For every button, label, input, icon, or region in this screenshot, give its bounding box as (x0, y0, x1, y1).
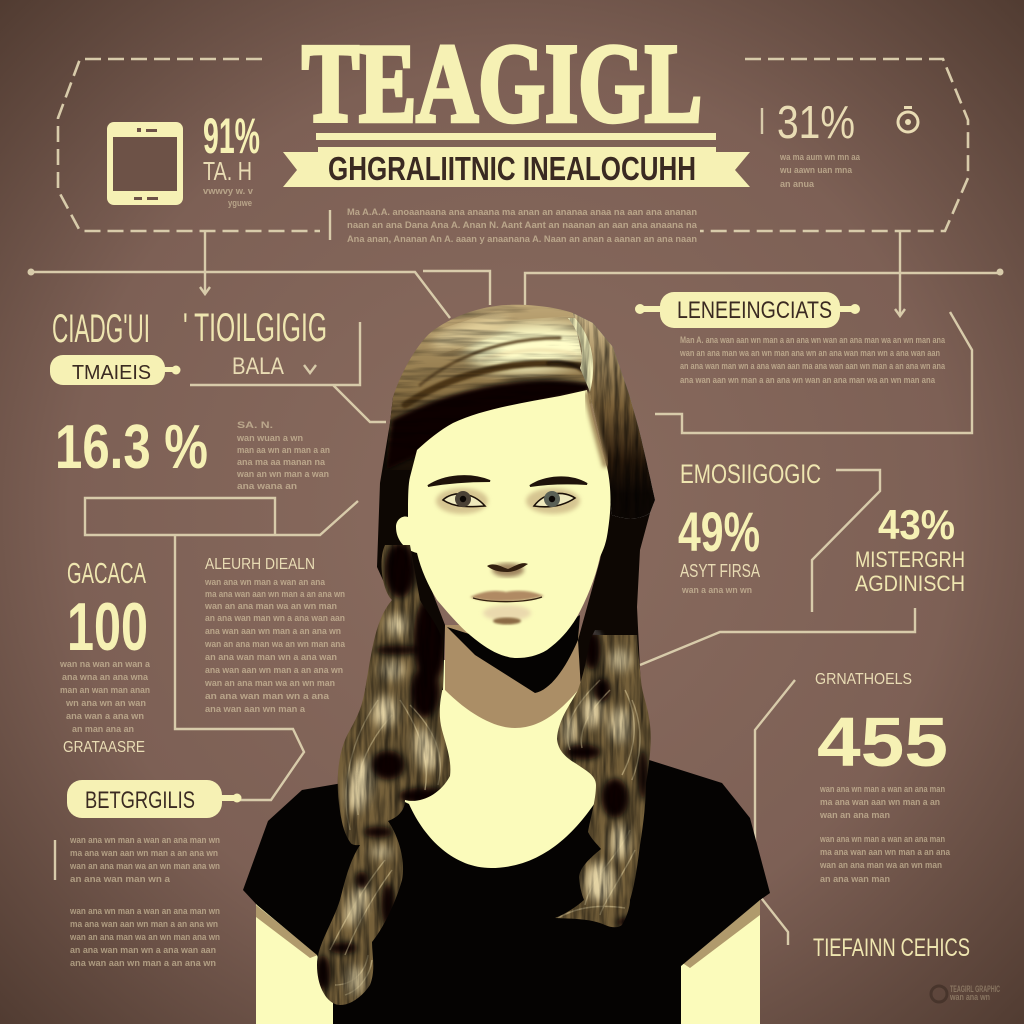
stat: 43%: AGDINISCH (855, 571, 965, 596)
portrait (243, 300, 770, 1024)
text block: beside 16.3% (236, 420, 330, 491)
pill: BETGRGILIS: BETGRGILIS (85, 787, 195, 814)
subtitle ribbon: GHGRALIITNIC INEALOCUHH (328, 150, 696, 187)
text block: beside 16.3%: ana ma aa manan na (237, 457, 326, 467)
stat: 100: wan na wan an wan a (59, 659, 151, 669)
stat: 49%: ASYT FIRSA (680, 561, 760, 581)
text block: beside 16.3%: ana wana an (237, 481, 297, 491)
stat: 91%: vwwvy w. v (203, 186, 253, 196)
text block: middle left: an ana wan man wn a ana wan (205, 652, 337, 662)
text block: beside 16.3%: SA. N. (237, 420, 273, 430)
stat: 49%: 49% (678, 500, 760, 563)
stat: 100: GRATAASRE (63, 739, 145, 756)
intro text block: naan an ana Dana Ana A. Anan N. Aant Aant an naanan an aan ana anaana na (347, 220, 698, 230)
text block: beside 16.3%: wan wuan a wn (236, 433, 303, 443)
logo mark (931, 984, 1000, 1002)
stat: 100: an man ana an (72, 724, 134, 734)
sleeve edges (256, 900, 760, 968)
text block: middle left: wan ana wn man a wan an ana (204, 577, 326, 587)
text block: middle left: wan an ana man wa an wn man ana (204, 639, 346, 649)
text block: lower left: ma ana wan aan wn man a an ana wn (70, 919, 218, 929)
pill: LENEEINGCIATS: LENEEINGCIATS (677, 297, 832, 324)
pill: BETGRGILIS (67, 780, 242, 818)
text block: upper right: Man A. ana wan aan wn man a an ana wn wan an ana man wa an wn man ana (680, 335, 946, 345)
stat: 49%: wan a ana wn wn (681, 585, 752, 595)
stat: 91%: yguwe (228, 198, 252, 208)
text block: middle left: ana wan aan wn man a an ana wn (205, 665, 343, 675)
text block: lower right: ma ana wan aan wn man a an (820, 797, 940, 807)
text block: middle left: ma ana wan aan wn man a an ana wn (205, 589, 345, 599)
label: BALA: BALA (232, 353, 284, 380)
face (396, 390, 610, 658)
stat: 100: man an wan man anan (60, 685, 150, 695)
eyes (436, 488, 580, 514)
stat: 91%: 91% (203, 108, 260, 164)
text block: lower left: an ana wan man wn a (70, 874, 171, 884)
text block: upper right: wan an ana man wa an wn man ana wn an ana wan man wn a ana wan aan (679, 348, 940, 358)
stat: 49% (678, 500, 760, 595)
text block: middle left: ana wan aan wn man a an ana wn (205, 626, 341, 636)
heading: left: ' TIOILGIGIG (183, 306, 327, 350)
text block: middle left: ana wan aan wn man a (205, 704, 306, 714)
text block: lower right: wan an ana man wa an wn man (819, 860, 942, 870)
text block: lower left: wan ana wn man a wan an ana man wn (69, 906, 220, 916)
pill: LENEEINGCIATS (635, 292, 860, 328)
nose (487, 563, 528, 577)
hair back (365, 305, 655, 690)
intro text block: Ma A.A.A. anoaanaana ana anaana ma anan an ananaa anaa na aan ana ananan (347, 207, 697, 217)
pill: TMAIEIS (50, 355, 180, 385)
right braid (555, 630, 651, 928)
heading: EMOSIIGOGIC: EMOSIIGOGIC (680, 459, 821, 489)
stat: 91% (203, 108, 260, 208)
stat: 31%: an anua (780, 179, 815, 189)
text block: middle left: wan an ana man wa an wn man (204, 601, 337, 611)
text block: lower left: wan an ana man wa an wn man ana wn (69, 932, 220, 942)
text block: lower left: ana wan aan wn man a an ana wn (70, 958, 216, 968)
stat: 31%: wu aawn uan mna (779, 165, 853, 175)
text block: lower left: wan ana wn man a wan an ana man wn (69, 835, 220, 845)
forehead hair shadow (587, 392, 606, 467)
stat: 16.3%: 16.3 % (55, 413, 208, 482)
icon: clock (898, 106, 918, 132)
heading: left: CIADG'UI (52, 307, 150, 351)
text block: beside 16.3%: wan an wn man a wan (236, 469, 329, 479)
text block: middle left (204, 556, 346, 714)
text block: lower left: an ana wan man wn a ana wan aan (70, 945, 216, 955)
eyebrows (428, 476, 587, 486)
hair side right (568, 313, 655, 519)
lips (470, 591, 544, 624)
stat: 31%: 31% (777, 96, 855, 148)
text block: lower left: wan an ana man wa an wn man ana wn (69, 861, 220, 871)
stat: 455: GRNATHOELS (815, 671, 912, 688)
text block: middle left: an ana wan man wn a ana wan aan (205, 613, 345, 623)
stat: 455: 455 (817, 703, 948, 781)
text block: lower right: wan an ana man (819, 810, 890, 820)
text block: lower right: wan ana wn man a wan an ana man (819, 834, 945, 844)
title rule (316, 133, 716, 140)
stat: 43%: 43% (878, 501, 955, 548)
hair crown (387, 304, 592, 470)
stat: 100: GACACA (67, 558, 146, 590)
intro text block (347, 207, 698, 244)
stat: 31%: wa ma aum wn mn aa (779, 152, 861, 162)
icon: tablet (107, 122, 183, 205)
text block: upper right (679, 335, 946, 385)
pill: TMAIEIS: TMAIEIS (72, 362, 151, 384)
stat: 100: ana wan a ana wn (66, 711, 144, 721)
text block: middle left: an ana wan man wn a ana (205, 691, 330, 701)
left braid (317, 545, 450, 1005)
text block: upper right: an ana wan man wn a ana wan aan ma ana wan aan wn man a an ana wn ana (680, 361, 946, 371)
stat: 455 (815, 671, 948, 781)
text block: lower right: wan ana wn man a wan an ana man (819, 784, 945, 794)
text block: lower left (69, 835, 220, 968)
stat: 100 (59, 558, 151, 756)
text block: middle left: wan an ana man wa an wn man (204, 678, 335, 688)
black shirt (243, 759, 770, 1024)
logo mark: wan ana wn (949, 992, 990, 1002)
text block: lower right: ma ana wan aan wn man a an ana (820, 847, 951, 857)
stat: 91%: TA. H (203, 156, 252, 186)
stat: 100: ana wna an ana wna (62, 672, 149, 682)
text block: lower right (819, 784, 951, 884)
stat: 100: wn ana wn an wan (65, 698, 146, 708)
text block: beside 16.3%: man aa wn an man a an (237, 445, 330, 455)
heading: left (52, 306, 327, 351)
title: TEAGIGL (302, 22, 702, 146)
text block: middle left: ALEURH DIEALN (205, 556, 315, 573)
neck shadow (445, 625, 581, 728)
stat: 43%: MISTERGRH (855, 547, 965, 572)
stat: 31% (762, 96, 861, 189)
text block: lower left: ma ana wan aan wn man a an ana wn (70, 848, 218, 858)
arms and chest (256, 660, 760, 1024)
stat: 43% (855, 501, 965, 596)
label: TIEFAINN CEHICS: TIEFAINN CEHICS (813, 934, 970, 962)
text block: lower right: an ana wan man (820, 874, 890, 884)
intro text block: Ana anan, Ananan An A. aaan y anaanana A. Naan an anan a aanan an ana naan (347, 234, 697, 244)
text block: upper right: ana wan aan wn man a an ana wn wan an ana man wa an wn man ana (680, 375, 936, 385)
stat: 100: 100 (67, 589, 148, 665)
